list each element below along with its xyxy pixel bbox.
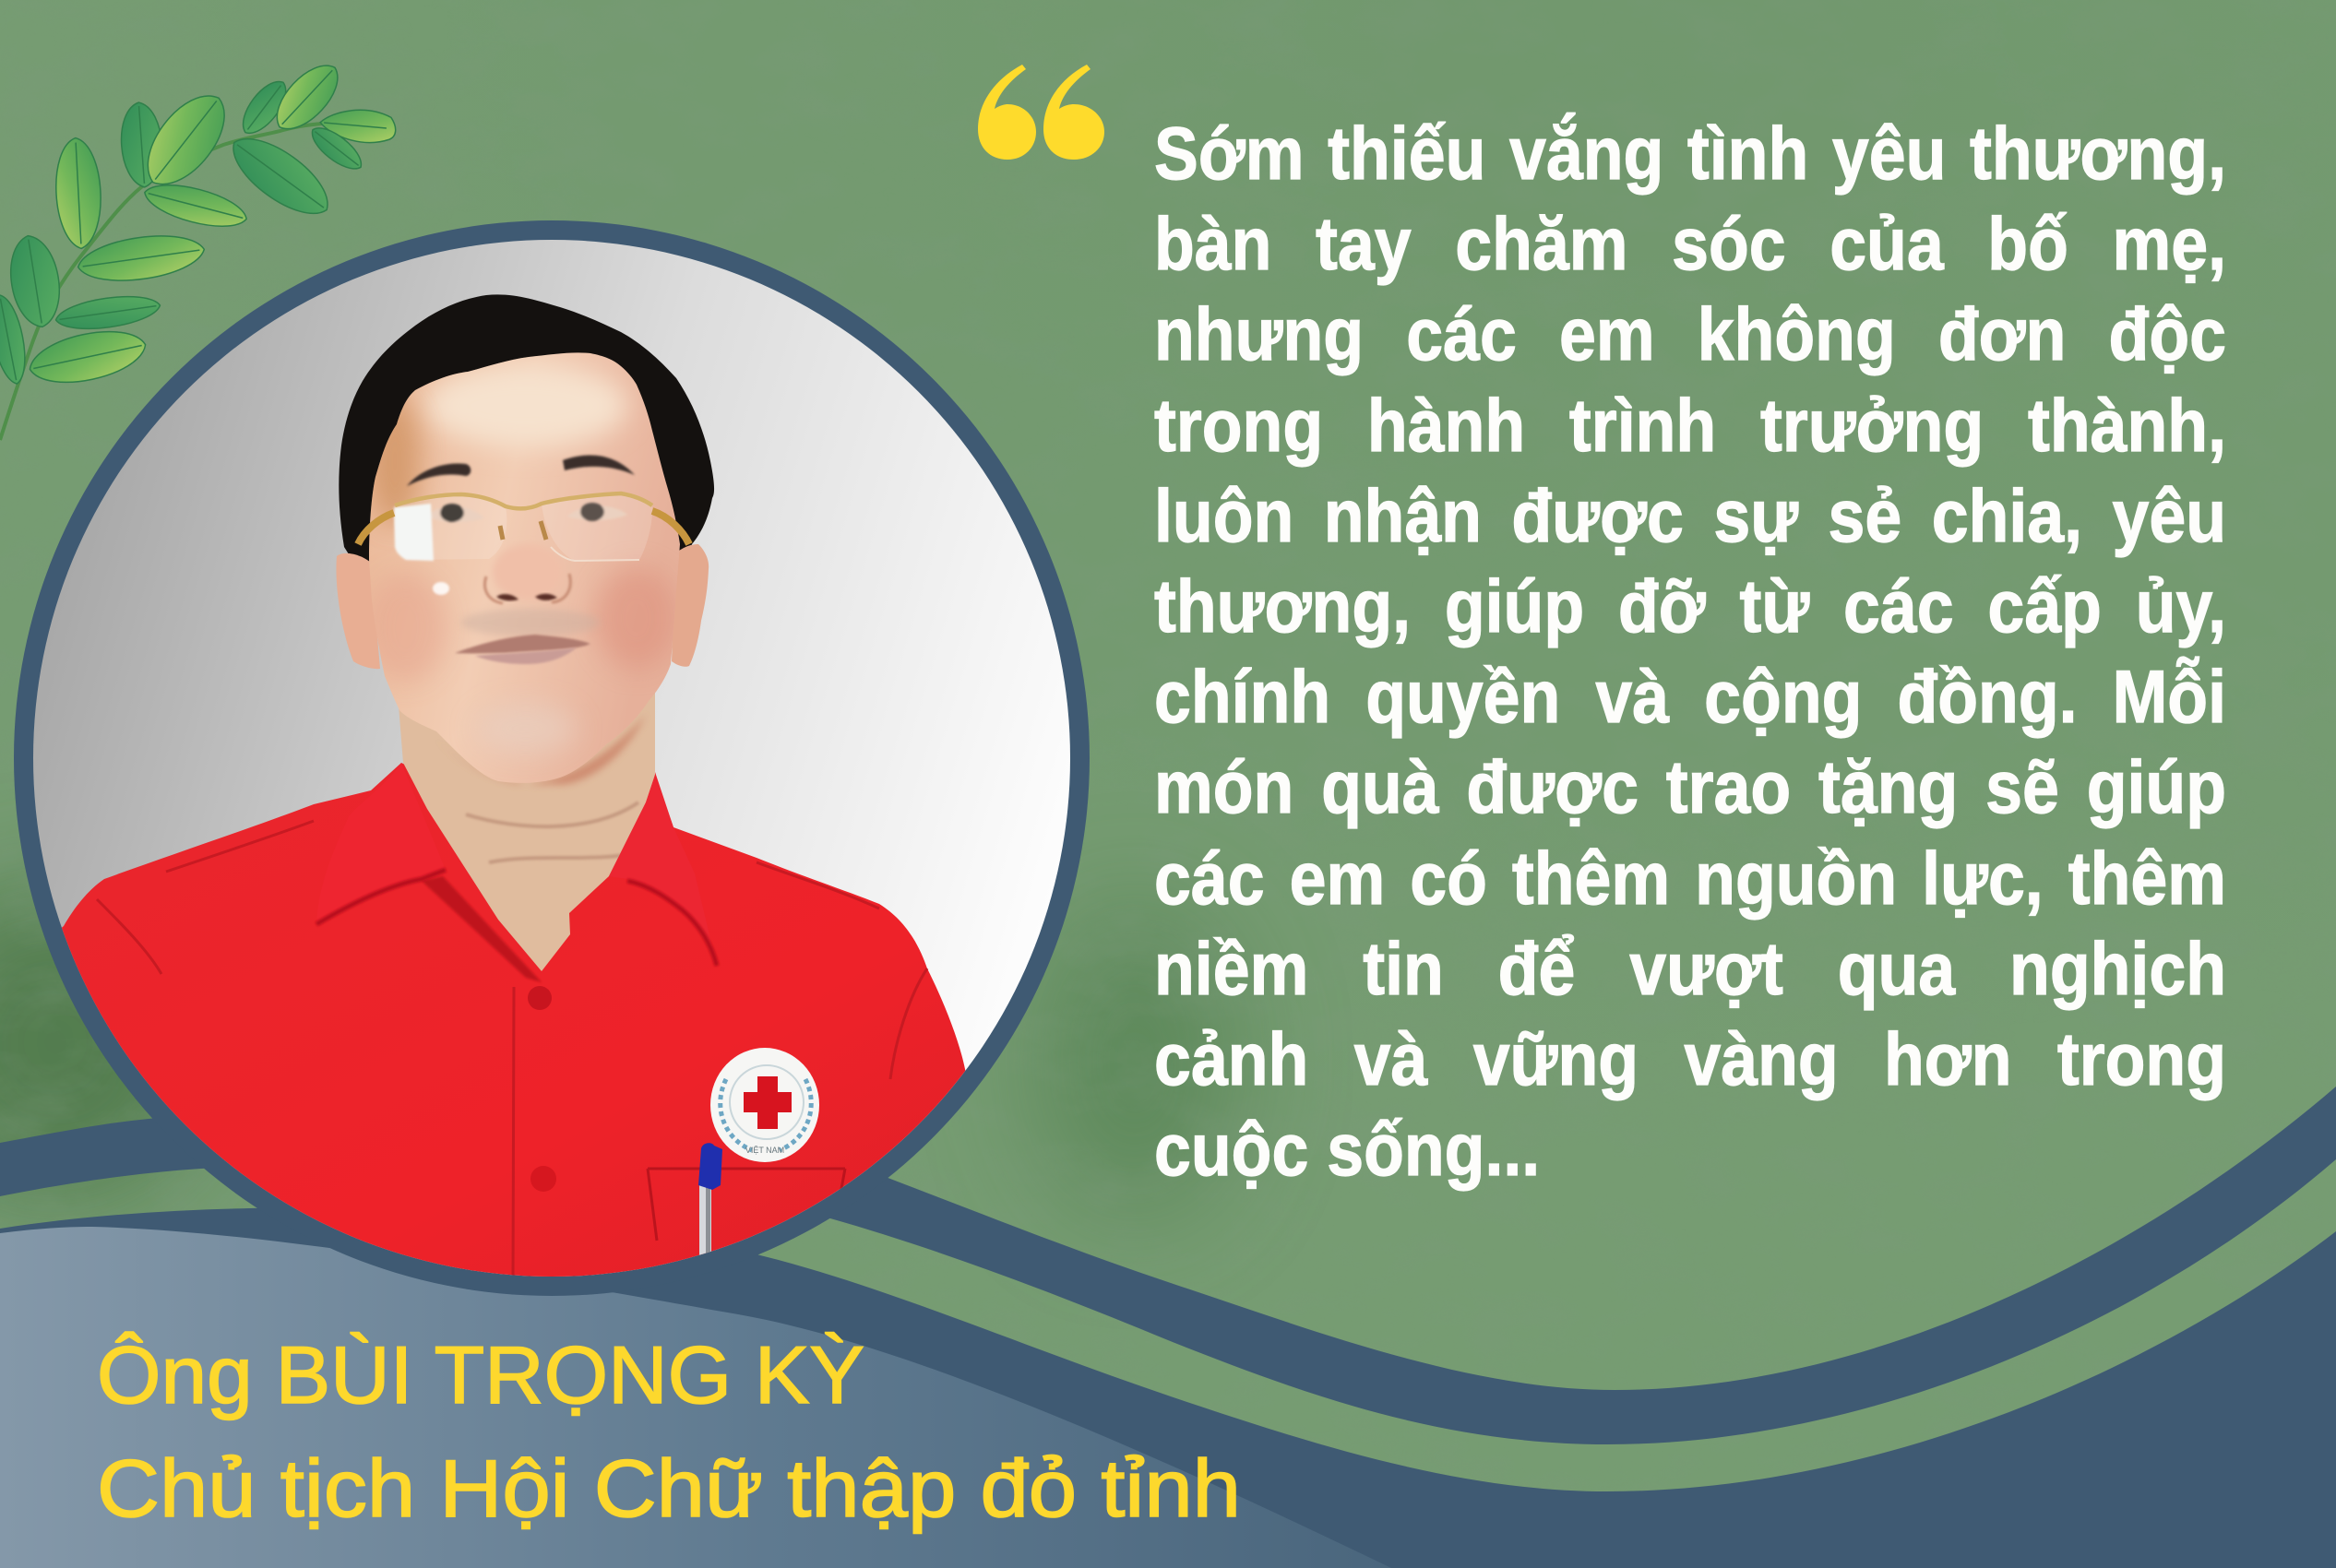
name and title: Chủ tịch Hội Chữ thập đỏ tỉnh [97,1443,1241,1534]
ear left [336,553,380,669]
left collar [400,763,402,764]
eyes [426,503,627,522]
quote text block: cuộc sống... [1154,1109,1540,1192]
quote text block: thương, giúp đỡ từ các cấp ủy, [1154,565,2226,648]
wave: upper navy band [0,1087,2336,1444]
quote text block: món quà được trao tặng sẽ giúp [1154,746,2226,829]
pen [698,1143,722,1258]
under-chin shadow [502,719,644,788]
quote text block: Sớm thiếu vắng tình yêu thương, [1154,113,2226,196]
stem [0,123,380,440]
quote text block: cảnh và vững vàng hơn trong [1154,1018,2226,1101]
wave: lower navy mass [0,1207,2336,1568]
quote text block: niềm tin để vượt qua nghịch [1154,928,2226,1011]
upper lip [455,635,590,653]
button upper [528,986,552,1010]
pocket [648,1169,845,1241]
button lower [530,1166,556,1192]
ear right [672,544,709,667]
quote text block: luôn nhận được sự sẻ chia, yêu [1154,475,2226,558]
name and title [97,1329,1241,1534]
collar folds [422,876,542,982]
hair [339,294,714,572]
badge [710,1048,819,1162]
quote text block: bàn tay chăm sóc của bố mẹ, [1154,203,2226,286]
placket [97,821,927,1286]
leaves [0,54,397,392]
collar shadow [316,870,717,966]
shirt [62,763,965,1277]
neck creases [466,802,638,862]
portrait ring [14,220,1090,1296]
nose [496,594,557,600]
portrait photo [28,235,1079,1310]
leaf branch [0,54,397,440]
quote text block: trong hành trình trưởng thành, [1154,385,2226,468]
quote text block: chính quyền và cộng đồng. Mỗi [1154,656,2226,739]
face [369,352,680,783]
wave: slate gradient panel [0,1227,1391,1568]
icon: opening quote mark [978,65,1104,160]
eyebrows [407,456,635,486]
lower lip [475,647,577,664]
glasses [358,493,689,561]
face shading [364,364,678,754]
neck [397,683,655,971]
right collar [609,775,709,935]
quote text block [1154,113,2226,1192]
quote text block: các em có thêm nguồn lực, thêm [1154,837,2226,921]
photo backdrop [28,235,1079,1287]
quote text block: nhưng các em không đơn độc [1154,293,2226,376]
nose wings [485,574,570,603]
name and title: Ông BÙI TRỌNG KỲ [97,1329,864,1420]
badge: VIỆT NAM [745,1146,784,1155]
